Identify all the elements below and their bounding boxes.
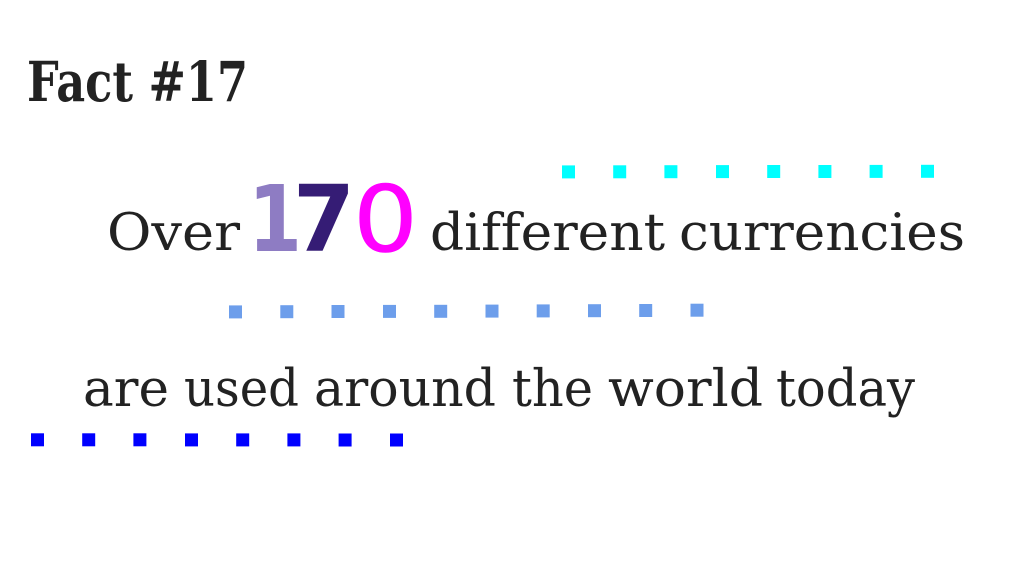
sentence line 2: used <box>184 360 299 419</box>
title: Fact #17 <box>27 49 248 114</box>
number 170: 7 <box>293 166 355 273</box>
sentence line 1 with highlighted number: currencies <box>679 204 965 263</box>
sentence line 2 <box>83 360 915 419</box>
dotted line: light blue <box>229 304 704 318</box>
sentence line 2: are <box>83 360 169 419</box>
number 170 <box>248 166 418 273</box>
dotted line: cyan <box>562 165 934 178</box>
number 170: 1 <box>248 166 302 273</box>
sentence line 1 with highlighted number: different <box>430 204 666 263</box>
sentence line 2: today <box>776 360 915 419</box>
sentence line 1 with highlighted number: Over <box>107 204 241 263</box>
sentence line 2: the <box>512 360 593 419</box>
sentence line 2: world <box>608 360 763 419</box>
number 170: 0 <box>353 166 418 273</box>
dotted line: blue <box>31 433 403 446</box>
sentence line 1 with highlighted number <box>107 166 965 273</box>
sentence line 2: around <box>314 360 496 419</box>
